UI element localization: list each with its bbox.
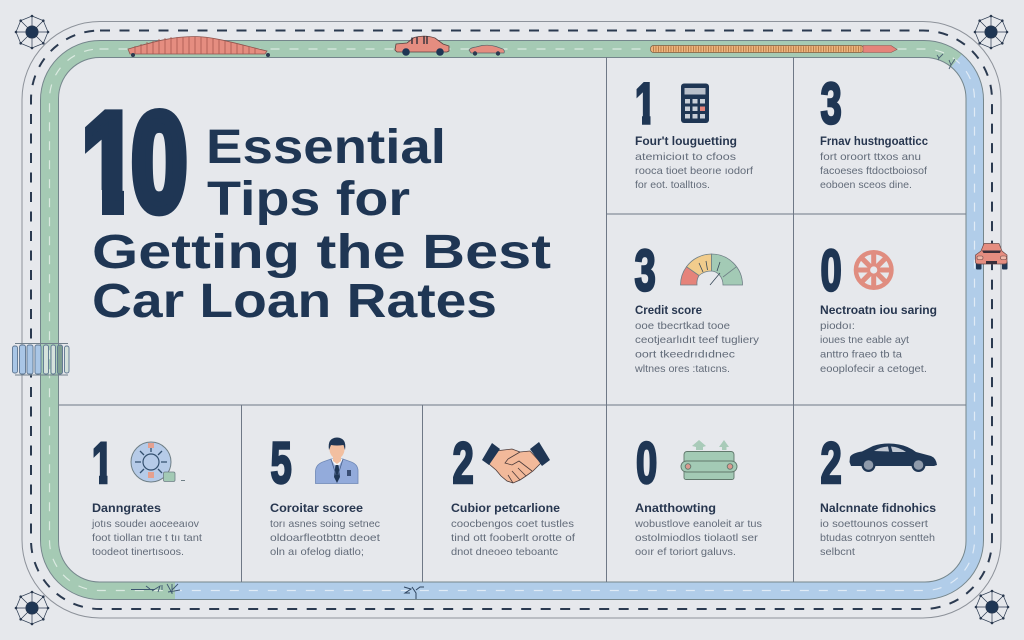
body text [634, 320, 760, 375]
panel: tip top 2 [820, 73, 929, 191]
icon: calculator [681, 84, 709, 123]
road vehicle: small salmon car [469, 45, 504, 56]
number 1: 1 [635, 73, 656, 137]
number 2: 2 [452, 432, 474, 496]
body text: oln aı ofelog diatlo; [270, 546, 364, 558]
body text [634, 518, 762, 558]
big number 10: 0 [132, 84, 187, 240]
body text: ceotjearlıdıt teef tugliery [635, 334, 760, 346]
number 2: 2 [820, 432, 842, 496]
heading: Danngrates [92, 503, 161, 515]
heading: Frnav hustngoatticc [820, 136, 929, 148]
panel: tip bottom 1 [92, 442, 202, 555]
compass ornament: bottom right [975, 590, 1009, 624]
number 3: 3 [820, 73, 842, 137]
heading: Cubior petcarlione [451, 503, 560, 515]
body text [451, 518, 575, 558]
right road car seen from front [976, 244, 1008, 270]
number 0: 0 [636, 432, 657, 496]
heading: Nectroatn iou saring [820, 305, 937, 317]
icon: gear badge [131, 442, 185, 482]
icon: advisor in suit [316, 438, 358, 484]
title line: Car Loan Rates: Car Loan Rates [92, 275, 497, 328]
compass ornament: top left [15, 15, 49, 49]
body text: rooca tioet beorıe ıodorf [635, 165, 753, 177]
body text: btudas cotnryon sentteh [820, 532, 935, 544]
body text [91, 518, 202, 558]
body text: ostolmiodlos tiolaotl ser [635, 532, 759, 544]
panel: tip wheel [820, 240, 937, 375]
body text: selbcnt [820, 546, 855, 558]
body text: atemicioıt to cfoos [635, 151, 736, 163]
number 0: 0 [820, 240, 842, 303]
body text: piodoı: [820, 320, 855, 332]
panel: tip bottom 5 [820, 432, 937, 558]
grid dividers [59, 57, 966, 582]
title line: Essential: Essential [206, 121, 446, 174]
icon: green sofa with arrows [681, 440, 737, 480]
compass ornament: bottom left [15, 591, 49, 625]
body text: wltnes ores :tatıcns. [634, 363, 730, 375]
heading: Four't louguetting [635, 136, 737, 148]
title line: Tips for: Tips for [207, 173, 410, 226]
heading: Credit score [635, 305, 702, 317]
panel: tip top 1 calculator [635, 82, 753, 188]
body text [635, 151, 753, 191]
body text: torı asnes soing setnec [270, 518, 380, 530]
title [85, 108, 550, 318]
body text: coocbengos coet tustles [451, 518, 574, 530]
body text: tind ott fooberlt orotte of [451, 532, 575, 544]
road vehicle: long salmon bridge truck [128, 36, 270, 57]
road vehicle: long orange pencil [650, 46, 897, 52]
body text [820, 320, 927, 375]
big number 10: 1 [82, 84, 137, 240]
road marks at bottom centre [404, 587, 424, 599]
panel: tip bottom 4 [634, 432, 762, 558]
body text: fort oroort ttxos anu [820, 151, 921, 163]
panel: tip bottom 2 [270, 432, 380, 558]
compass ornament: top right [974, 15, 1008, 49]
body text: io soettounos cossert [820, 518, 928, 530]
body text: jotıs soudeı aoceeaıov [91, 518, 200, 530]
body text: anttro fraeo tb ta [820, 348, 902, 360]
icon: navy car [850, 444, 937, 472]
body text: toodeot tinertısoos. [92, 546, 184, 558]
heading: Nalcnnate fidnohics [820, 503, 936, 515]
body text [270, 518, 380, 558]
icon: wheel [856, 252, 892, 288]
body text: oldoarfleotbttn deoet [270, 532, 380, 544]
panel: tip bottom 3 [451, 432, 575, 558]
heading: Anatthowting [635, 503, 716, 515]
body text: dnot dneoeo teboantc [451, 546, 558, 558]
body text [820, 518, 935, 558]
number 5: 5 [270, 432, 292, 496]
body text: ioues tne eable ayt [820, 334, 909, 346]
left road crossing stripes [12, 344, 69, 375]
body text: eoboen sceos dine. [820, 179, 912, 191]
body text: wobustlove eanoleit ar tus [634, 518, 762, 530]
number 3: 3 [634, 240, 656, 303]
number 1: 1 [92, 432, 113, 496]
big number 10 [85, 108, 187, 216]
title line: Getting the Best: Getting the Best [92, 226, 551, 279]
body text: oort tkeedrıdıdnec [635, 348, 735, 360]
body text: foot tiollan trıe t tıı tant [92, 532, 202, 544]
heading: Coroitar scoree [270, 503, 363, 515]
road marks at bottom left [131, 584, 180, 594]
body text: eooplofecir a cetoget. [820, 363, 927, 375]
body text: ooe tbecrtkad tooe [635, 320, 730, 332]
body text [820, 151, 927, 191]
icon: credit gauge [680, 254, 742, 285]
body text: ooır ef toriort galuvs. [635, 546, 736, 558]
road marks near top right bend [937, 54, 955, 69]
body text: facoeses ftdoctboiosof [820, 165, 927, 177]
road vehicle: salmon sedan [395, 36, 449, 56]
body text: for eot. toalltıos. [635, 179, 710, 191]
panel: tip credit score [634, 240, 760, 375]
icon: handshake [482, 442, 550, 483]
